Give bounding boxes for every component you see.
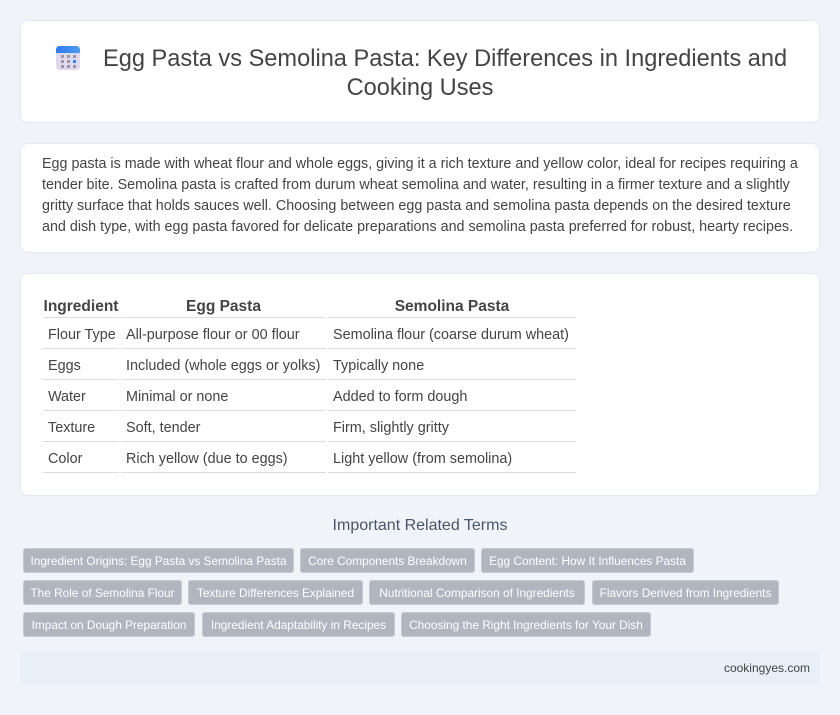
related terms tags: Impact on Dough Preparation: [32, 618, 186, 632]
comparison table: Minimal or none: [126, 389, 228, 405]
comparison table: Semolina Pasta: [395, 298, 509, 315]
comparison table: Rich yellow (due to eggs): [126, 451, 288, 467]
related terms tags: Ingredient Origins: Egg Pasta vs Semolina Pasta: [30, 554, 287, 568]
comparison table: [43, 298, 576, 473]
header panel: [20, 20, 820, 123]
related terms tags: Ingredient Adaptability in Recipes: [211, 618, 386, 632]
comparison table: Flour Type: [48, 327, 116, 343]
intro panel: [20, 143, 820, 253]
table panel: [20, 273, 820, 496]
icon: calendar: [56, 46, 80, 70]
related terms tags: Nutritional Comparison of Ingredients: [379, 586, 575, 600]
intro text: and dish type, with egg pasta favored for delicate preparations and semolina pasta preferred for robust, hearty recipes.: [42, 219, 793, 235]
comparison table: Added to form dough: [333, 389, 467, 405]
intro text: gritty surface that holds sauces well. Choosing between egg pasta and semolina pasta depends on the desired texture: [42, 198, 791, 214]
comparison table: Firm, slightly gritty: [333, 420, 449, 436]
footer bar: [20, 651, 820, 685]
intro text: Egg pasta is made with wheat flour and whole eggs, giving it a rich texture and yellow color, ideal for recipes requiring a: [42, 156, 798, 172]
comparison table: Egg Pasta: [186, 298, 261, 315]
related terms tags: Core Components Breakdown: [308, 554, 467, 568]
related terms tags: Egg Content: How It Influences Pasta: [489, 554, 686, 568]
title: [103, 46, 787, 101]
intro text: tender bite. Semolina pasta is crafted from durum wheat semolina and water, resulting in a firmer texture and a slightly: [42, 177, 790, 193]
comparison table: Included (whole eggs or yolks): [126, 358, 320, 374]
related terms tags: [23, 548, 779, 637]
related terms tags: The Role of Semolina Flour: [30, 586, 175, 600]
comparison table: Water: [48, 389, 86, 405]
comparison table: Color: [48, 451, 82, 467]
title: Egg Pasta vs Semolina Pasta: Key Differences in Ingredients and: [103, 46, 787, 72]
comparison table: Soft, tender: [126, 420, 200, 436]
intro text: [42, 156, 798, 235]
related terms tags: Flavors Derived from Ingredients: [600, 586, 771, 600]
comparison table: Eggs: [48, 358, 81, 374]
related terms tags: Texture Differences Explained: [197, 586, 354, 600]
comparison table: Typically none: [333, 358, 424, 374]
related terms heading: Important Related Terms: [333, 517, 507, 534]
comparison table: Light yellow (from semolina): [333, 451, 512, 467]
comparison table: Texture: [48, 420, 95, 436]
comparison table: Ingredient: [44, 298, 118, 315]
related terms tags: Choosing the Right Ingredients for Your Dish: [409, 618, 643, 632]
title: Cooking Uses: [347, 75, 493, 101]
footer source: cookingyes.com: [724, 661, 810, 675]
comparison table: All-purpose flour or 00 flour: [126, 327, 300, 343]
comparison table: Semolina flour (coarse durum wheat): [333, 327, 569, 343]
